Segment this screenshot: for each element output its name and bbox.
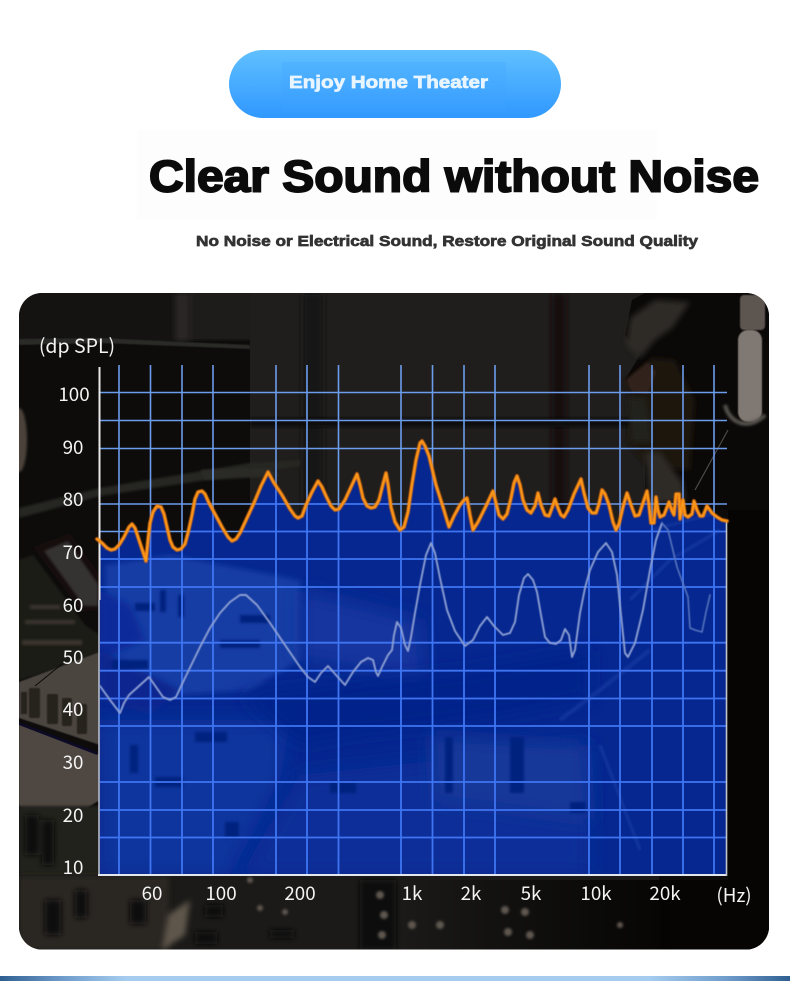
y axis labels: 50 (63, 643, 83, 670)
light grid above the curve (100, 365, 727, 547)
faint title backdrop (137, 130, 657, 220)
panel: studio photo with frequency chart (11, 293, 770, 950)
y axis labels: 60 (63, 591, 83, 618)
x axis labels: 5k (521, 879, 542, 906)
y axis labels: 90 (63, 433, 83, 460)
bright grid inside the blue area (100, 448, 726, 874)
x axis labels: 1k (402, 879, 423, 906)
x axis labels: 200 (284, 879, 316, 906)
photo backdrop: studio room and mixer (11, 293, 770, 950)
x axis labels (142, 885, 750, 906)
x axis labels: 10k (580, 879, 612, 906)
x axis labels: (Hz) (716, 881, 752, 908)
blue area under the curve (100, 444, 726, 874)
orange response curve (97, 441, 727, 561)
y axis unit label: (dp SPL) (39, 330, 115, 359)
x axis labels: 100 (205, 879, 237, 906)
y axis labels (58, 380, 90, 880)
y axis labels: 30 (63, 748, 83, 775)
x axis labels: 20k (649, 879, 681, 906)
y axis labels: 40 (63, 695, 83, 722)
pill button: Enjoy Home Theater (229, 50, 561, 118)
x axis labels: 60 (142, 879, 162, 906)
pill button: Enjoy Home Theater: Enjoy Home Theater (289, 72, 488, 92)
y axis labels: 80 (63, 485, 83, 512)
photo: man with headphones (624, 293, 770, 510)
x axis labels: 2k (461, 879, 482, 906)
y axis labels: 70 (63, 538, 83, 565)
subtitle: No Noise or Electrical Sound, Restore Original Sound Quality (196, 234, 698, 250)
bottom gradient band (0, 976, 790, 981)
pale comparison curve (100, 523, 710, 713)
axes frame (98, 367, 727, 876)
y axis labels: 100 (58, 380, 90, 407)
title: Clear Sound without Noise (149, 152, 759, 202)
y axis labels: 10 (63, 853, 83, 880)
y axis labels: 20 (63, 801, 83, 828)
